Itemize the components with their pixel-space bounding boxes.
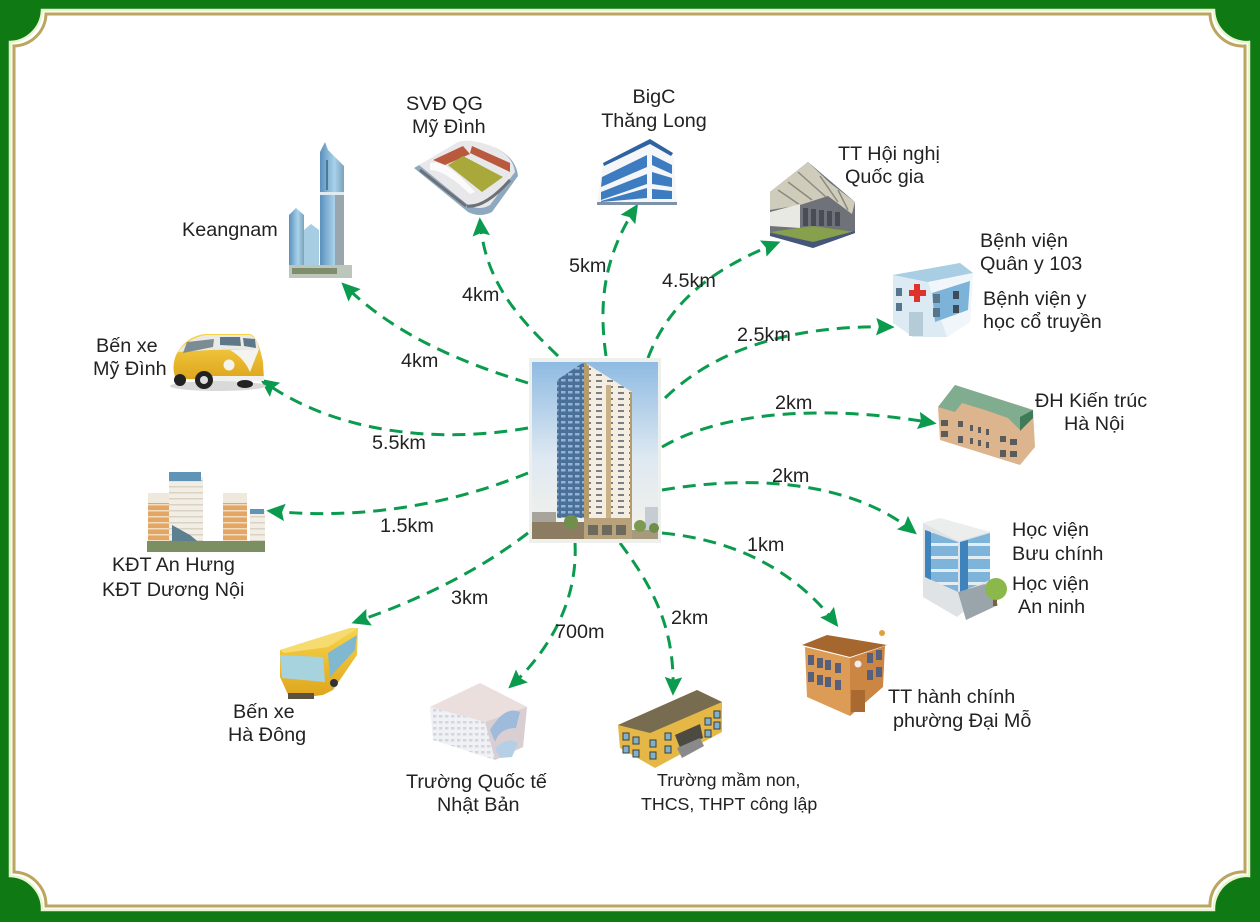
label: Japanese international school: Trường Quốc tế (406, 771, 547, 793)
icon: BigC building (597, 139, 677, 205)
arrow: Ha Dong bus station (355, 533, 528, 622)
icon: Japanese international school (430, 683, 527, 760)
distance labels: 1.5km (380, 515, 434, 537)
label: convention centre: Quốc gia (845, 166, 924, 188)
label: stadium: Mỹ Đình (412, 116, 486, 138)
label: hospitals: Bệnh viện y (983, 288, 1086, 310)
label: Ha Dong bus station (228, 701, 306, 746)
label: academies: Học viện (1012, 573, 1089, 595)
label: Ha Dong bus station: Bến xe (233, 701, 295, 723)
label: convention centre: TT Hội nghị (838, 143, 940, 165)
icon: An Hung urban towers (147, 472, 265, 552)
label: administrative centre: phường Đại Mỗ (893, 709, 1031, 732)
central photo: apartment tower (529, 358, 661, 543)
arrow: An Hung urban area (270, 473, 528, 514)
label: Ha Dong bus station: Hà Đông (228, 724, 306, 746)
distance labels: 2km (775, 392, 812, 414)
icon: academy office building (923, 518, 1007, 620)
label: architecture university: Hà Nội (1064, 413, 1124, 435)
icon: convention centre (770, 162, 855, 248)
label: Japanese international school (406, 771, 547, 816)
label: academies (1012, 519, 1103, 618)
label: stadium: SVĐ QG (406, 93, 483, 115)
distance labels: 4.5km (662, 270, 716, 292)
arrow: Japanese school (511, 543, 575, 686)
label: Keangnam: Keangnam (182, 219, 278, 241)
icon: public school (618, 690, 722, 768)
distance labels: 5km (569, 255, 606, 277)
distance labels (372, 255, 812, 643)
label: My Dinh bus station: Bến xe (96, 335, 158, 357)
arrow: administrative centre (662, 533, 836, 624)
label: hospitals: học cổ truyền (983, 311, 1102, 333)
label: convention centre (838, 143, 940, 188)
distance labels: 4km (462, 284, 499, 306)
icon: administrative centre (802, 630, 887, 716)
arrow: architecture university (662, 413, 933, 447)
icon: stadium (414, 141, 518, 215)
distance labels: 1km (747, 534, 784, 556)
label: academies: Bưu chính (1012, 543, 1103, 565)
label: hospitals: Bệnh viện (980, 230, 1068, 252)
distance labels: 2.5km (737, 324, 791, 346)
label: architecture university: ĐH Kiến trúc (1035, 390, 1147, 412)
label: My Dinh bus station: Mỹ Đình (93, 358, 167, 380)
label: BigC: Thăng Long (601, 110, 707, 132)
label: public schools: THCS, THPT công lập (641, 794, 817, 814)
label: public schools: Trường mầm non, (657, 770, 800, 790)
icon: My Dinh yellow van (170, 334, 266, 391)
label: An Hung and Duong Noi (102, 554, 244, 601)
label: hospitals (980, 230, 1102, 333)
icon: Ha Dong bus (280, 628, 358, 699)
label: BigC (601, 86, 707, 132)
label: An Hung and Duong Noi: KĐT Dương Nội (102, 579, 244, 601)
label: stadium (406, 93, 486, 138)
arrow: BigC (603, 207, 636, 356)
arrow: post academy (662, 483, 914, 532)
arrow: stadium (480, 221, 558, 356)
label: architecture university (1035, 390, 1147, 435)
label: administrative centre: TT hành chính (888, 686, 1015, 708)
arrow: Keangnam (344, 285, 528, 383)
arrow: My Dinh bus station (263, 381, 528, 435)
label: Japanese international school: Nhật Bản (437, 794, 519, 816)
label: An Hung and Duong Noi: KĐT An Hưng (112, 554, 235, 576)
icon: architecture university (938, 385, 1035, 465)
distance labels: 5.5km (372, 432, 426, 454)
distance labels: 4km (401, 350, 438, 372)
distance labels: 700m (555, 621, 604, 643)
arrow: hospital (665, 327, 891, 398)
label: My Dinh bus station (93, 335, 167, 380)
label: academies: Học viện (1012, 519, 1089, 541)
arrow: public schools (620, 543, 673, 692)
icon: Keangnam towers (289, 142, 352, 278)
label: hospitals: Quân y 103 (980, 253, 1082, 275)
label: public schools (641, 770, 817, 814)
icon: hospital (893, 263, 973, 337)
label: BigC: BigC (633, 86, 675, 108)
distance labels: 2km (671, 607, 708, 629)
arrows from the central tower to each destination (263, 207, 933, 692)
distance labels: 3km (451, 587, 488, 609)
label: administrative centre (888, 686, 1031, 732)
label: academies: An ninh (1018, 596, 1085, 618)
arrow: convention centre (648, 243, 777, 358)
distance labels: 2km (772, 465, 809, 487)
